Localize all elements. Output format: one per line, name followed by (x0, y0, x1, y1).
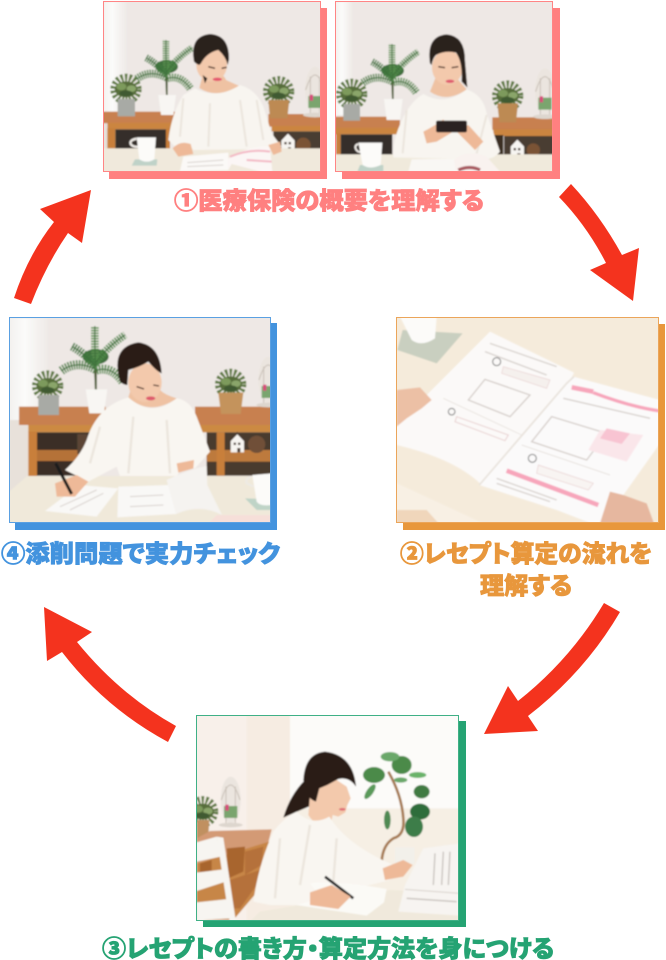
blue border (10, 318, 270, 522)
photo: woman writing by window with plant (197, 716, 458, 920)
photo frame: woman scanning with smartphone (330, 0, 563, 179)
arrow: step 1 to step 2 (559, 184, 639, 301)
photo frame: woman working on the correction test (0, 310, 280, 530)
green offset shadow (203, 721, 466, 927)
orange border (396, 318, 658, 522)
arrow: step 3 to step 4 (44, 607, 176, 742)
caption: step 1: ①医療保険の概要を理解する (174, 188, 484, 215)
pink offset shadow (109, 8, 327, 179)
caption: step 2 (400, 540, 652, 600)
caption line 2: 理解する (480, 573, 572, 600)
photo frame: open textbook (390, 310, 666, 530)
blue offset shadow (15, 323, 277, 530)
pink border (336, 2, 552, 172)
orange offset shadow (403, 324, 665, 530)
green border (196, 716, 458, 920)
photo: woman holding smartphone (336, 2, 552, 171)
pink offset shadow (342, 8, 560, 179)
pink border (104, 2, 320, 172)
photo: woman writing at desk (10, 318, 270, 522)
caption line 1: ②レセプト算定の流れを (400, 540, 652, 568)
arrow: step 4 to step 1 (14, 190, 91, 304)
photo frame: woman studying by the window (190, 705, 467, 927)
photo: open textbook on desk (397, 318, 658, 522)
arrow: step 2 to step 3 (484, 603, 620, 734)
photo: woman reading at desk (104, 2, 320, 171)
caption: step 4: ④添削問題で実力チェック (1, 541, 280, 568)
photo frame: woman reading the textbook (100, 0, 333, 179)
